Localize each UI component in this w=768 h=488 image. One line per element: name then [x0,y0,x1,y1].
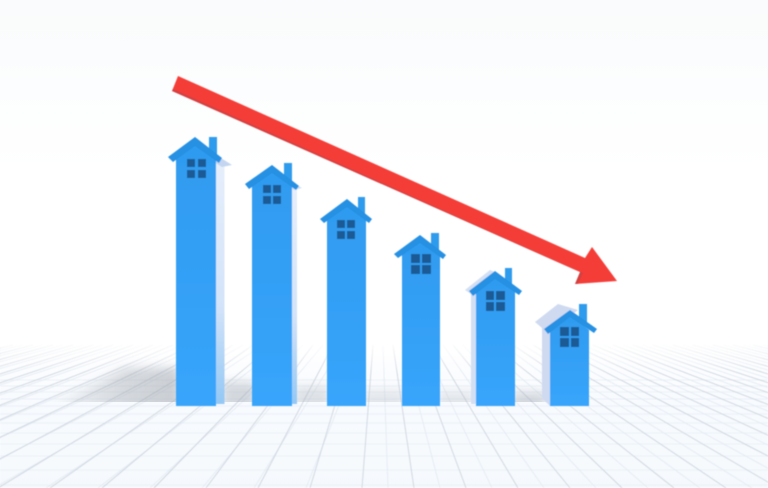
house 2 [245,163,302,406]
house 1 [168,137,232,406]
floor grid [0,340,768,488]
windows [263,185,281,204]
house 6 [535,304,597,406]
windows [411,254,431,274]
house 4 [394,233,446,406]
floor shadows [66,364,546,402]
windows [560,327,579,347]
windows [337,220,355,239]
windows [187,159,206,178]
house 3 [320,197,372,406]
arrow: downward trend [172,76,617,284]
windows [486,291,505,311]
house 5 [465,268,522,406]
